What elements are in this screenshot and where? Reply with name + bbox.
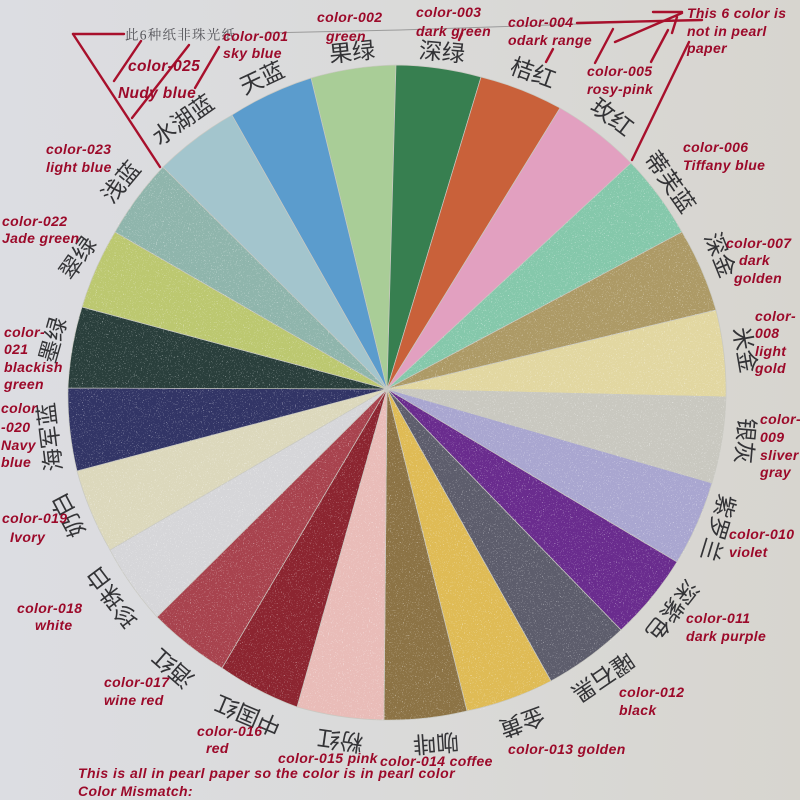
label: color-017: color-017 (104, 674, 170, 690)
wedge: color-006 Tiffany blue (387, 163, 682, 389)
label: 粉红: 粉红 (315, 724, 365, 756)
label: color-008: color- (755, 308, 796, 324)
colour wheel (68, 65, 726, 720)
label: color-001: sky blue (223, 45, 282, 61)
wedge: color-012 black (387, 389, 621, 681)
label: 咖啡: 咖啡 (412, 728, 460, 758)
wedge: color-023 light blue (115, 167, 387, 389)
label: color-002: color-002 (317, 9, 382, 25)
label: color-022: Jade green (2, 230, 79, 246)
label: 深金: 深金 (699, 229, 741, 281)
label: color-013: color-013 golden (508, 741, 626, 757)
label: color-020: color (1, 400, 38, 416)
label: color-008: light (755, 343, 787, 359)
label: color-019: Ivory (10, 529, 46, 545)
wedge: color-001 sky blue (232, 78, 387, 389)
label: color-012: color-012 (619, 684, 684, 700)
label: 玫红: 玫红 (586, 93, 638, 141)
label: color-009: 009 (760, 429, 784, 445)
label: color-019: color-019 (2, 510, 67, 526)
label: 紫罗兰: 紫罗兰 (695, 491, 741, 565)
label: color-002: green (325, 28, 366, 44)
label: 蒂芙蓝: 蒂芙蓝 (640, 146, 700, 218)
heading: six colours not pearl (Chinese): 此6种纸非珠光纸 (125, 26, 236, 42)
note: not in pearl paper: This 6 color is (687, 5, 786, 21)
label: 米金: 米金 (728, 325, 762, 375)
label: 深紫色: 深紫色 (641, 575, 703, 645)
label: color-020: -020 (1, 419, 30, 435)
label: color-023: color-023 (46, 141, 111, 157)
label: 深绿: 深绿 (418, 37, 466, 67)
label: color-023: light blue (46, 159, 112, 175)
red annotation lines: left group (73, 34, 219, 167)
label: color-006: Tiffany blue (683, 157, 765, 173)
label: 曜石黑: 曜石黑 (567, 647, 639, 707)
label: color-006: color-006 (683, 139, 748, 155)
footer note: pearl paper: This is all in pearl paper so the color is in pearl color (78, 765, 456, 781)
label: color-022: color-022 (2, 213, 67, 229)
label: 翠绿: 翠绿 (54, 232, 102, 284)
note: not in pearl paper: paper (686, 40, 728, 56)
label: 桔红: 桔红 (507, 53, 559, 93)
label: color-007: golden (733, 270, 782, 286)
label: color-009: gray (759, 464, 792, 480)
note: not in pearl paper: not in pearl (687, 23, 767, 39)
label: color-008: 008 (755, 325, 779, 341)
wedge: color-008 light gold (387, 310, 726, 397)
wedge: color-003 dark green (387, 65, 481, 389)
label: 金黄: 金黄 (496, 702, 548, 742)
label: color-009: sliver (760, 447, 800, 463)
label: 海军蓝: 海军蓝 (33, 401, 67, 473)
label: 天蓝: 天蓝 (236, 56, 288, 100)
label: color-010: color-010 (729, 526, 794, 542)
wedge: color-009 silver gray (387, 389, 726, 483)
wedge: color-016 red (222, 389, 387, 707)
label: color-001: color-001 (223, 28, 288, 44)
label: color-004: odark range (508, 32, 592, 48)
wedge: color-007 dark golden (387, 232, 716, 389)
label: color-020: Navy (1, 437, 37, 453)
wedge: color-020 navy blue (68, 388, 387, 471)
wedge: color-025 nudy blue (163, 115, 387, 389)
label: color-020: blue (1, 454, 31, 470)
label: color-005: color-005 (587, 63, 652, 79)
label: color-004: color-004 (508, 14, 573, 30)
label: 墨绿: 墨绿 (34, 314, 72, 366)
label: color-014: color-014 coffee (380, 753, 493, 769)
label: 水湖蓝: 水湖蓝 (147, 90, 219, 150)
label: color-018: white (35, 617, 73, 633)
label: 浅蓝: 浅蓝 (96, 156, 146, 208)
label: 珍珠白: 珍珠白 (81, 562, 143, 632)
red annotation lines: right group (459, 12, 702, 160)
label: color-011: color-011 (686, 610, 750, 626)
wedge: color-019 ivory (77, 389, 387, 550)
label: color-008: gold (754, 360, 786, 376)
label: color-025: color-025 (128, 58, 200, 75)
label: color-007: dark (739, 252, 771, 268)
label: color-016: red (206, 740, 229, 756)
wedge: color-022 jade green (82, 232, 387, 389)
label: color-021: green (3, 376, 44, 392)
label: color-021: color- (4, 324, 45, 340)
wedge: color-018 white (110, 389, 387, 617)
wedge: color-017 wine red (157, 389, 387, 668)
label: color-003: color-003 (416, 4, 481, 20)
wedge: color-002 green (311, 65, 396, 389)
label: color-021: 021 (4, 341, 28, 357)
label: color-015: color-015 pink (278, 750, 379, 766)
wedge: color-010 violet (387, 389, 712, 562)
footer note: color mismatch: Color Mismatch: (78, 783, 193, 799)
label: color-025: Nudy blue (118, 85, 196, 102)
wedge: color-005 rosy pink (387, 108, 631, 389)
label: color-021: blackish (4, 359, 63, 375)
label: 果绿: 果绿 (328, 37, 376, 67)
label: color-011: dark purple (686, 628, 766, 644)
label: color-003: dark green (416, 23, 491, 39)
label: 银灰: 银灰 (730, 417, 760, 465)
thin gray guide line (265, 20, 698, 33)
wedge: color-013 golden (387, 389, 551, 711)
label: color-005: rosy-pink (587, 81, 654, 97)
label: color-012: black (619, 702, 657, 718)
label: color-018: color-018 (17, 600, 82, 616)
wedge: color-021 blackish green (68, 307, 387, 389)
pearl sparkle texture (68, 164, 726, 720)
wedge: color-015 pink (297, 389, 387, 720)
label: color-007: color-007 (726, 235, 792, 251)
label: color-009: color- (760, 411, 800, 427)
wedge: color-014 coffee (384, 389, 467, 720)
wedge: color-011 dark purple (387, 389, 677, 630)
label: 奶白: 奶白 (46, 489, 90, 541)
label: 酒红: 酒红 (147, 643, 199, 693)
label: color-010: violet (729, 544, 769, 560)
label: 中国红: 中国红 (211, 690, 285, 740)
wedge: color-004 orange (387, 77, 560, 389)
label: color-016: color-016 (197, 723, 262, 739)
label: color-017: wine red (104, 692, 164, 708)
